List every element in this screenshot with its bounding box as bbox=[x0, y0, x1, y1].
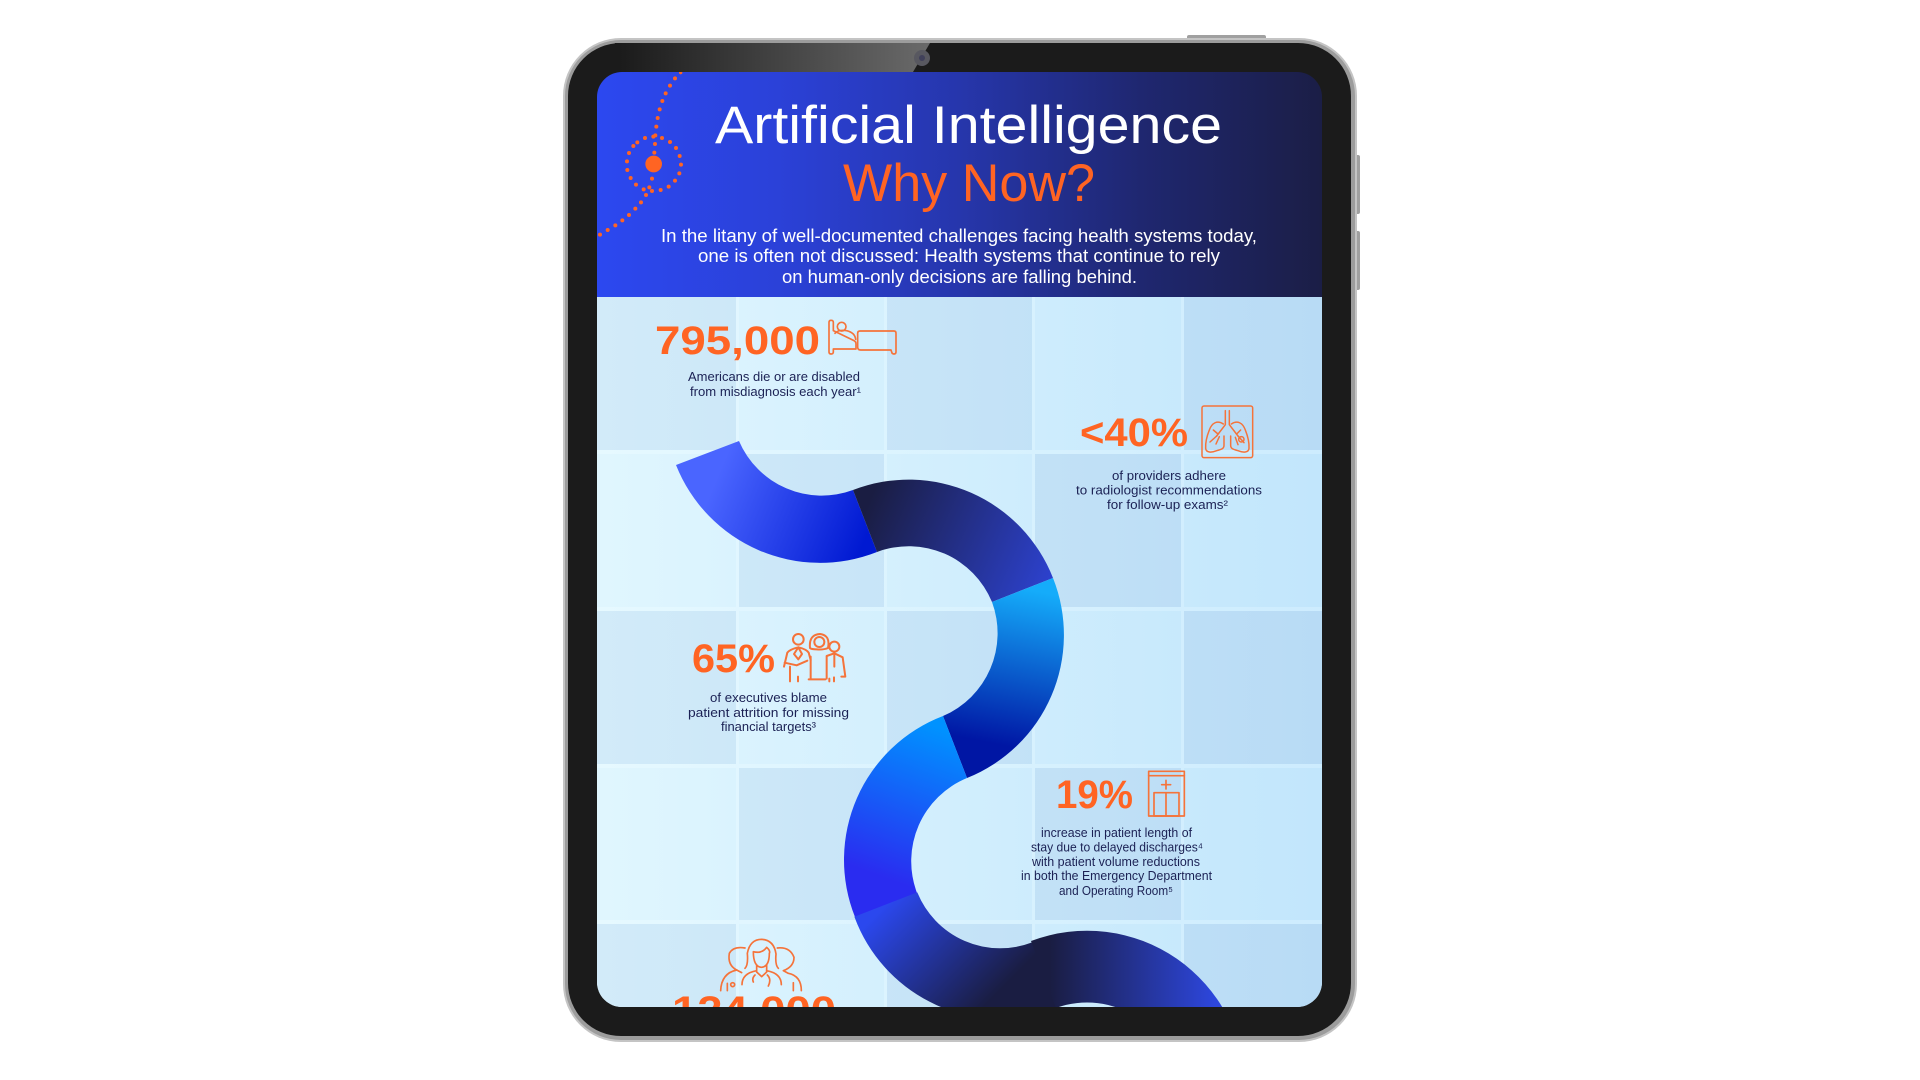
caption bbox=[1076, 468, 1263, 512]
title bbox=[715, 96, 1222, 213]
caption: for follow-up exams² bbox=[1107, 497, 1229, 512]
stat: under 40%: <40% bbox=[1080, 411, 1188, 455]
header band bbox=[597, 72, 1322, 297]
intro paragraph bbox=[661, 226, 1257, 287]
title: Artificial Intelligence bbox=[715, 96, 1222, 155]
caption: of providers adhere bbox=[1112, 468, 1226, 483]
caption: in both the Emergency Department bbox=[1021, 868, 1212, 883]
icon: clinicians group bbox=[721, 939, 801, 991]
dotted orbit decoration bbox=[598, 71, 683, 237]
stat: 124,000 bbox=[675, 938, 834, 1007]
stat: 19% bbox=[1021, 771, 1212, 898]
caption: increase in patient length of bbox=[1041, 825, 1192, 840]
icon: lungs bbox=[1202, 406, 1253, 458]
caption bbox=[1021, 825, 1212, 898]
screen bbox=[597, 71, 1322, 1080]
icon: executives group bbox=[784, 634, 845, 681]
stat: 19%: 19% bbox=[1056, 773, 1133, 817]
tablet illustration bbox=[563, 35, 1360, 1042]
stat: 124,000: 124,000 bbox=[672, 989, 836, 1033]
stat: under 40% bbox=[1076, 406, 1263, 512]
intro paragraph: In the litany of well-documented challenges facing health systems today, bbox=[661, 226, 1257, 246]
stat: 795,000: 795,000 bbox=[655, 319, 820, 363]
winding blue ribbon bbox=[676, 441, 1222, 1007]
stat: 65%: 65% bbox=[692, 637, 775, 681]
caption: patient attrition for missing bbox=[688, 705, 849, 720]
side and top buttons bbox=[1187, 35, 1360, 290]
stat: 795,000 bbox=[655, 319, 896, 399]
intro paragraph: on human-only decisions are falling behind. bbox=[782, 267, 1137, 287]
icon: hospital elevator bbox=[1149, 771, 1184, 816]
caption bbox=[688, 690, 849, 734]
title: Why Now? bbox=[843, 154, 1095, 213]
caption: of executives blame bbox=[710, 690, 827, 705]
caption bbox=[688, 372, 861, 398]
device body bbox=[563, 38, 1357, 1042]
caption: financial targets³ bbox=[721, 719, 817, 734]
tile grid background bbox=[597, 297, 1322, 1007]
caption: to radiologist recommendations bbox=[1076, 482, 1263, 498]
caption: and Operating Room⁵ bbox=[1059, 883, 1173, 898]
icon: hospital bed bbox=[829, 320, 896, 354]
caption: with patient volume reductions bbox=[1031, 854, 1200, 869]
intro paragraph: one is often not discussed: Health systems that continue to rely bbox=[698, 246, 1220, 266]
caption: from misdiagnosis each year¹ bbox=[690, 384, 862, 399]
stat: 65% bbox=[688, 634, 849, 734]
caption: stay due to delayed discharges⁴ bbox=[1031, 840, 1203, 854]
caption: Americans die or are disabled bbox=[688, 369, 860, 384]
